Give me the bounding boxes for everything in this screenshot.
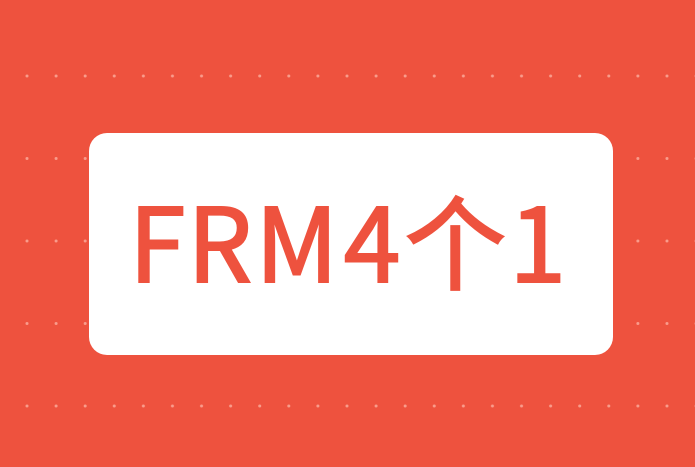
title: FRM4个1 [129,165,566,312]
panel: white title card [89,133,613,355]
